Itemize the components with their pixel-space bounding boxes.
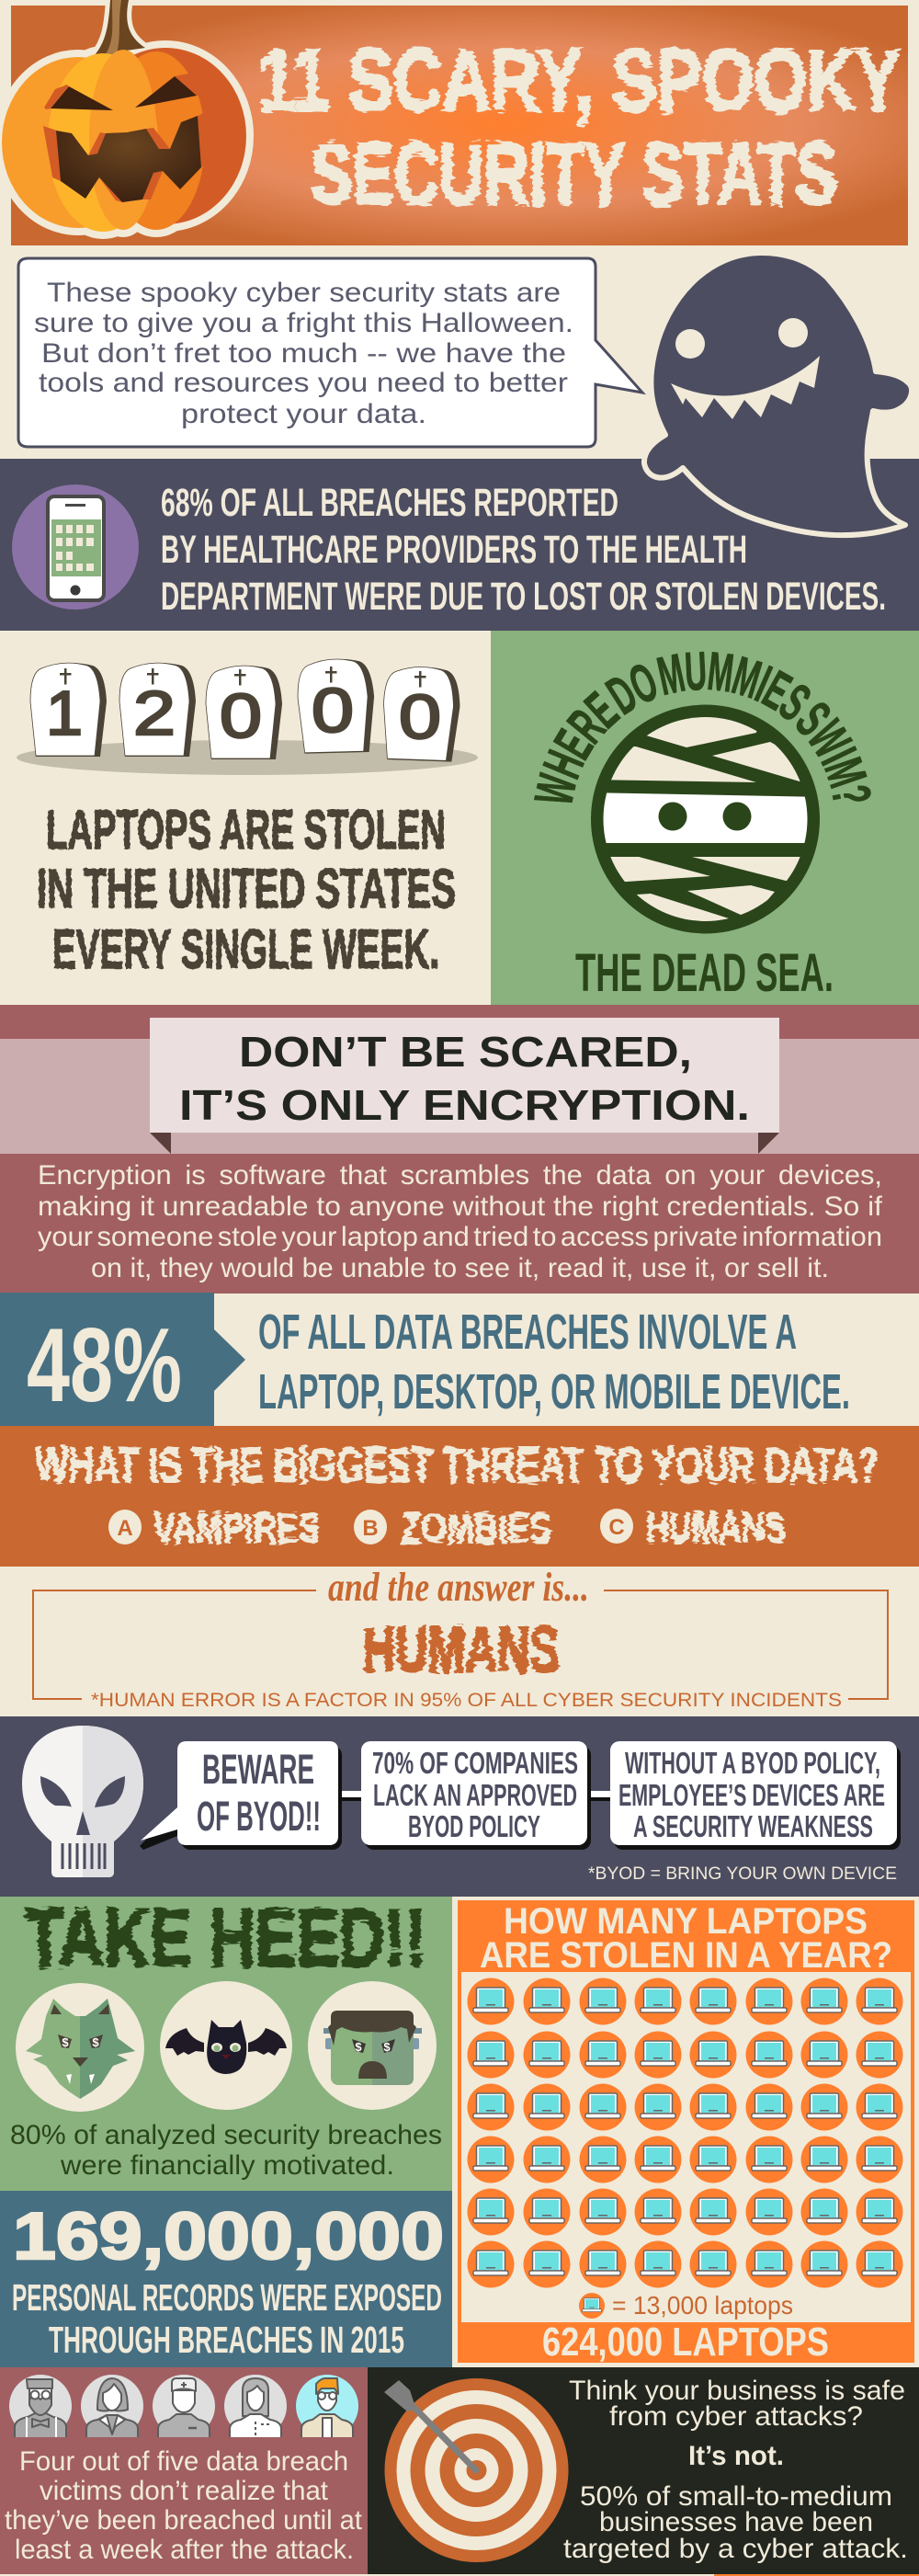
option A: A: [117, 1516, 133, 1541]
icon: frankenstein monster: $: [383, 2040, 391, 2054]
breach victims text: they’ve been breached until at: [5, 2505, 363, 2536]
panel: 169,000,000 records: THROUGH BREACHES IN 2015: [49, 2319, 404, 2361]
curved question text: I: [809, 740, 867, 773]
total laptops: 624,000 LAPTOPS: [542, 2320, 829, 2365]
stat text: [161, 481, 886, 619]
icon: mummy face: [588, 704, 827, 938]
curved question text: W: [795, 712, 862, 769]
icon: werewolf: [16, 1983, 144, 2112]
intro speech bubble: These spooky cyber security stats are: [47, 278, 561, 308]
breach victims text: [5, 2446, 363, 2565]
title banner: [11, 6, 908, 245]
business safety text: 50% of small-to-medium: [580, 2481, 892, 2512]
curved question text: E: [574, 681, 630, 740]
callout: 70 percent of companies: LACK AN APPROVED: [373, 1778, 577, 1812]
option B: B: [362, 1516, 379, 1541]
ribbon folds: [150, 1133, 779, 1154]
icon: jack-o-lantern pumpkin: [2, 0, 246, 232]
icons: five people: [9, 2375, 358, 2438]
panel: take heed: [0, 1892, 452, 2191]
callout: beware of BYOD: [140, 1741, 342, 1850]
breach victims text: victims don’t realize that: [40, 2476, 329, 2506]
business safety text: It’s not.: [688, 2441, 784, 2471]
financially motivated text: [10, 2120, 442, 2181]
stolen laptops text: EVERY SINGLE WEEK.: [52, 918, 439, 980]
financially motivated text: 80% of analyzed security breaches: [10, 2120, 442, 2150]
option A: [108, 1504, 320, 1552]
panel: quiz answer: *HUMAN ERROR IS A FACTOR IN 95% OF ALL CYBER SECURITY INCIDENTS: [91, 1690, 842, 1711]
panel: breach victims: [0, 2367, 368, 2574]
curved question text: O: [621, 652, 666, 716]
panel: lost or stolen devices stat: [0, 459, 919, 631]
stolen laptops text: LAPTOPS ARE STOLEN: [46, 799, 446, 861]
curved question text: [524, 642, 882, 811]
encryption paragraph: your someone stole your laptop and tried to access private information: [38, 1222, 882, 1252]
legend: = 13,000 laptops: [612, 2291, 793, 2320]
business safety text: from cyber attacks?: [609, 2401, 863, 2432]
option C: C: [608, 1515, 625, 1540]
panel: encryption: [0, 1005, 919, 1294]
icon: smiling ghost: [644, 253, 912, 535]
curved question text: E: [543, 721, 606, 769]
panel: mummy joke: [491, 631, 919, 1005]
icon: frankenstein monster: [308, 1981, 437, 2110]
panel: biggest threat quiz: [0, 1426, 919, 1567]
panel: small business targets: [368, 2367, 919, 2576]
stat text: 68% OF ALL BREACHES REPORTED: [161, 481, 618, 525]
pictogram grid of laptops: [467, 1978, 902, 2287]
tombstones with 12000: 0: [220, 681, 262, 751]
panel heading: HOW MANY LAPTOPS: [504, 1901, 868, 1942]
curved question text: ?: [820, 781, 882, 810]
callout: 70 percent of companies: [361, 1741, 591, 1850]
panel: quiz answer: and the answer is...: [328, 1565, 589, 1610]
icon: skull: [22, 1726, 143, 1877]
panel: 169,000,000 records: [0, 2191, 452, 2367]
encryption paragraph: [38, 1160, 883, 1283]
encryption paragraph: on it, they would be unable to see it, read it, use it, or sell it.: [91, 1253, 829, 1283]
stolen laptops text: IN THE UNITED STATES: [37, 858, 456, 919]
take heed heading: TAKE HEED!!: [25, 1892, 426, 1983]
business safety text: targeted by a cyber attack.: [563, 2534, 908, 2564]
curved question text: M: [652, 644, 690, 707]
tombstones with 12000: 0: [312, 676, 354, 746]
panel: 48 percent stat: 48%: [27, 1307, 182, 1424]
business safety text: businesses have been: [599, 2507, 873, 2537]
curved question text: U: [684, 642, 709, 702]
callout: 70 percent of companies: BYOD POLICY: [408, 1809, 540, 1843]
tombstones with 12000: 0: [399, 682, 441, 752]
panel heading: ARE STOLEN IN A YEAR?: [480, 1935, 892, 1976]
financially motivated text: were financially motivated.: [60, 2150, 394, 2181]
connectors between boxes: [331, 1791, 616, 1797]
intro speech bubble: But don’t fret too much -- we have the: [41, 338, 566, 369]
panel: beware of BYOD: [0, 1716, 919, 1897]
intro speech bubble: sure to give you a fright this Halloween.: [34, 308, 573, 338]
callout: 70 percent of companies: 70% OF COMPANIES: [372, 1746, 578, 1780]
curved question text: M: [726, 646, 767, 711]
icon: bat: [160, 1981, 292, 2110]
option B: ZOMBIES: [401, 1504, 551, 1552]
panel heading: [480, 1901, 892, 1976]
curved question text: R: [557, 700, 618, 754]
icon: werewolf: $: [92, 2035, 99, 2049]
heading ribbon: IT’S ONLY ENCRYPTION.: [179, 1081, 750, 1129]
icon: frankenstein monster: $: [355, 2040, 362, 2054]
tombstones with 12000: [17, 658, 478, 775]
curved question text: M: [705, 642, 737, 704]
option A: VAMPIRES: [153, 1504, 320, 1552]
breach victims text: least a week after the attack.: [15, 2535, 354, 2565]
heading ribbon: DON’T BE SCARED,: [239, 1028, 692, 1076]
heading ribbon: [150, 1018, 779, 1133]
breach victims text: Four out of five data breach: [19, 2446, 348, 2477]
intro speech bubble: protect your data.: [181, 399, 426, 429]
panel: 169,000,000 records: 169,000,000: [13, 2200, 444, 2274]
callout: without a BYOD policy: [610, 1741, 901, 1850]
callout: beware of BYOD: BEWARE: [202, 1746, 314, 1793]
curved question text: E: [753, 660, 800, 723]
curved question text: I: [747, 655, 779, 713]
curved question text: H: [532, 743, 596, 786]
panel: 48 percent stat: [0, 1293, 850, 1426]
curved question text: W: [524, 769, 589, 811]
panel: quiz answer: [33, 1565, 888, 1711]
BYOD footnote: *BYOD = BRING YOUR OWN DEVICE: [588, 1864, 897, 1884]
panel: 169,000,000 records: PERSONAL RECORDS WERE EXPOSED: [12, 2276, 442, 2319]
icon: smartphone: [12, 484, 139, 610]
option C: HUMANS: [646, 1503, 786, 1551]
curved question text: D: [597, 664, 648, 726]
curved question text: M: [812, 751, 878, 794]
business safety text: Think your business is safe: [569, 2376, 905, 2406]
panel: quiz answer: HUMANS: [363, 1613, 560, 1685]
curved question text: S: [768, 673, 821, 733]
encryption paragraph: Encryption is software that scrambles the data on your devices,: [38, 1160, 882, 1191]
curved question text: S: [784, 691, 842, 747]
panel: laptops stolen in a year: [458, 1900, 914, 2365]
icon: werewolf: $: [62, 2035, 69, 2049]
stolen laptops text: [37, 799, 456, 980]
option C: [600, 1503, 786, 1551]
business safety text: [563, 2376, 908, 2564]
intro speech bubble: [18, 258, 642, 447]
tombstones with 12000: 1: [46, 678, 83, 748]
callout: beware of BYOD: OF BYOD!!: [197, 1793, 321, 1840]
intro speech bubble: tools and resources you need to better: [39, 368, 568, 398]
option B: [354, 1504, 551, 1552]
panel: 12000 laptops stolen: [17, 658, 478, 980]
tombstones with 12000: 2: [133, 678, 176, 748]
icon: target with arrow: [384, 2378, 568, 2562]
encryption paragraph: making it unreadable to anyone without the right credentials. So if: [38, 1191, 883, 1222]
